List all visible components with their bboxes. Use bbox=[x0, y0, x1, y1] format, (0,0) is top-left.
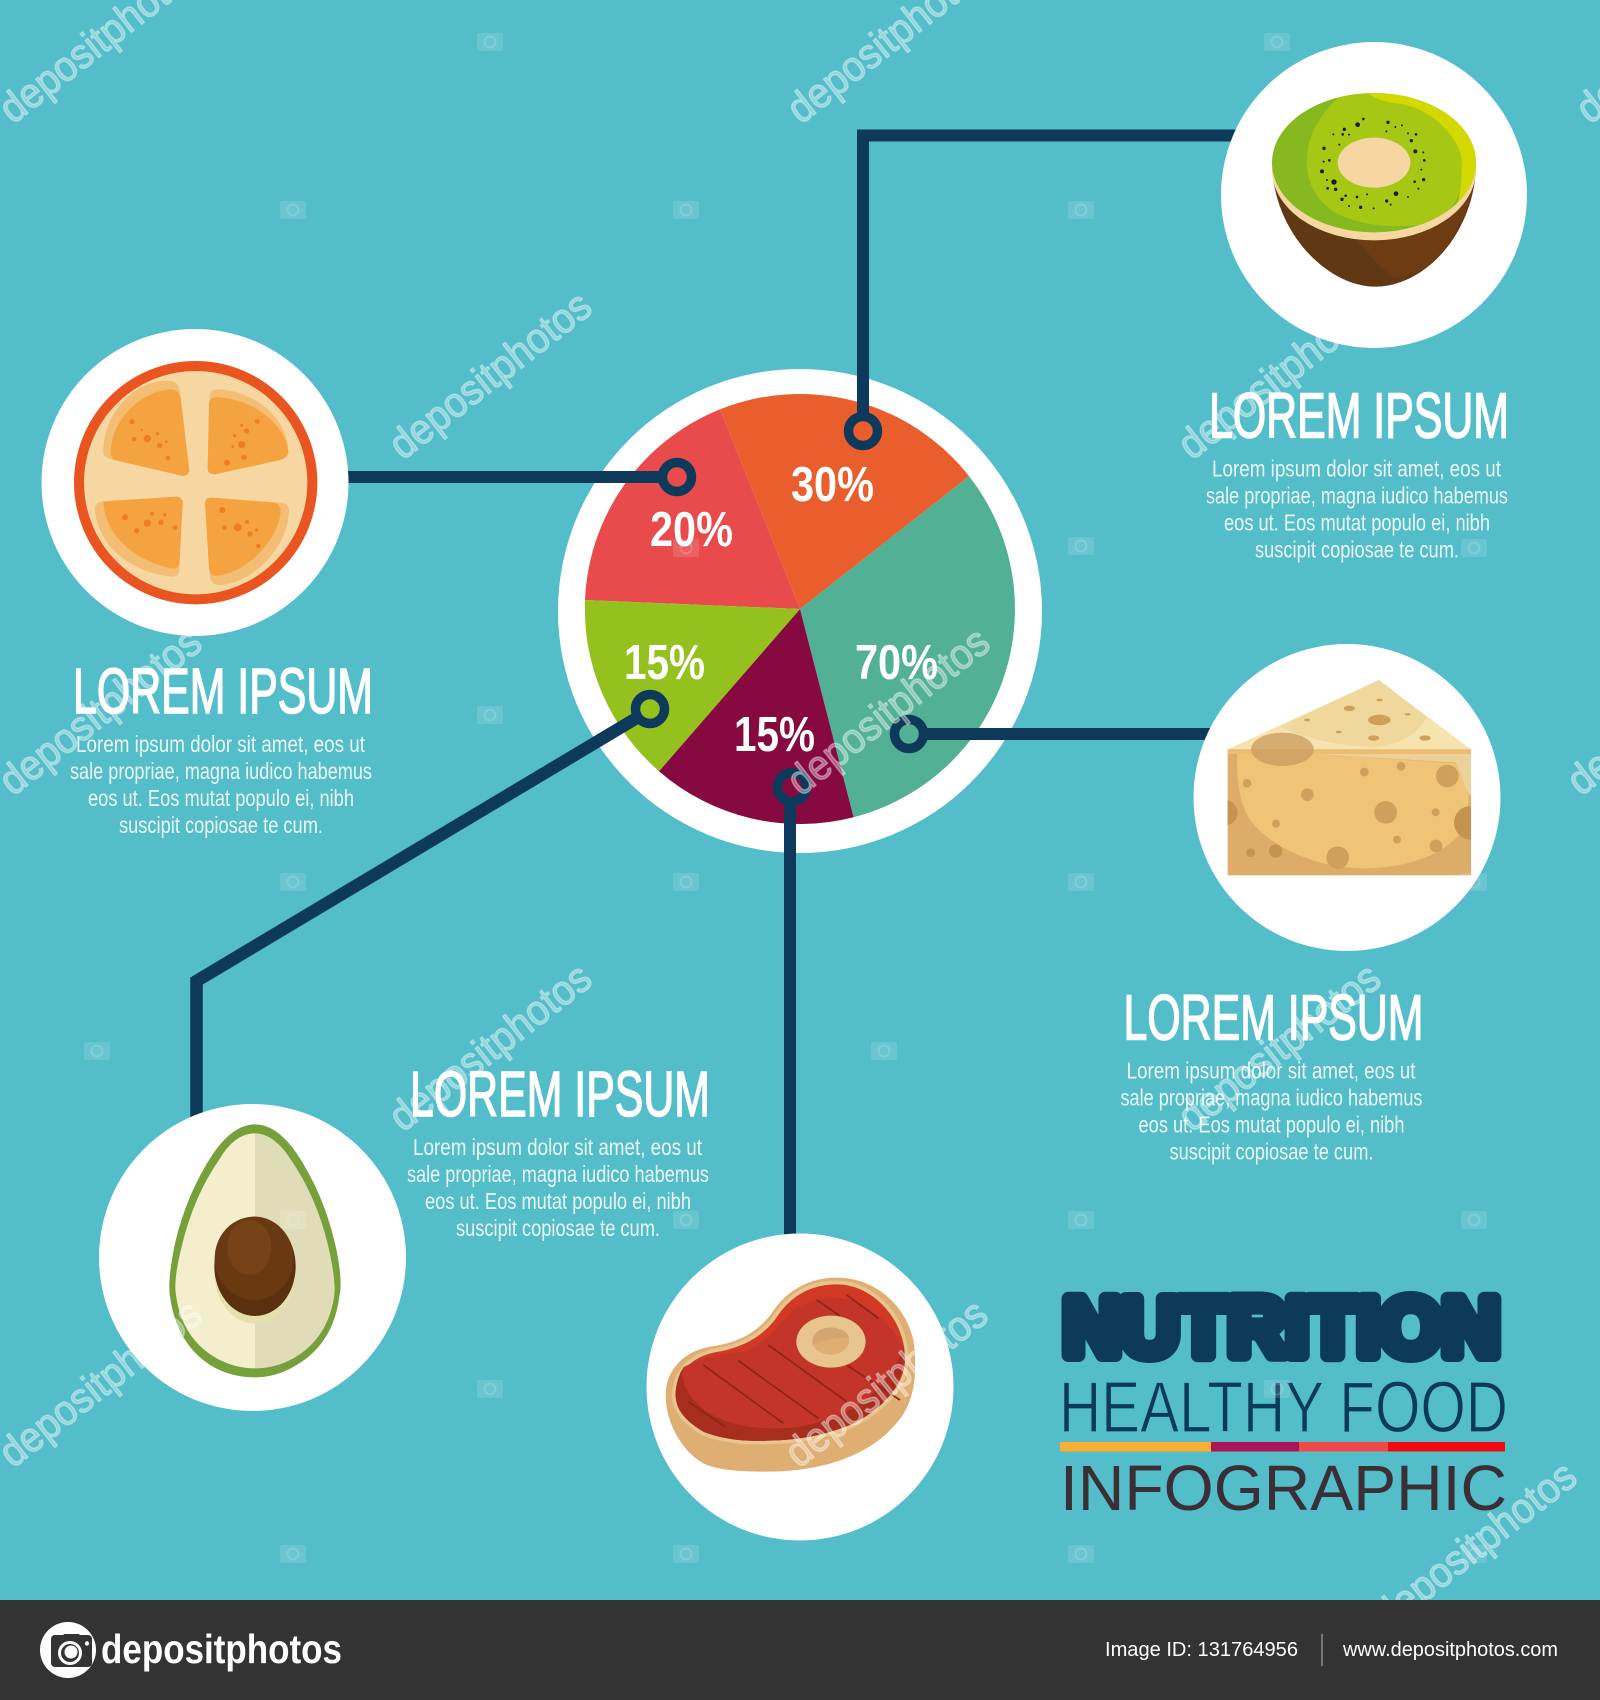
footer bar bbox=[0, 1600, 1600, 1700]
body copy bbox=[70, 731, 372, 838]
text block: avocado bbox=[407, 1058, 710, 1241]
text block: bread bbox=[70, 655, 373, 838]
watermark: depositphotos text: depositphotos bbox=[1169, 953, 1389, 1140]
watermark: depositphotos text: depositphotos bbox=[380, 953, 600, 1140]
text block: cheese bbox=[1120, 982, 1424, 1164]
heading: LOREM IPSUM bbox=[73, 655, 373, 727]
icon: avocado bbox=[99, 1104, 406, 1411]
connector: kiwi bbox=[863, 136, 1240, 420]
body copy: eos ut. Eos mutat populo ei, nibh bbox=[1224, 510, 1490, 536]
label 30%: 30% bbox=[791, 458, 874, 512]
label 15% lime: 15% bbox=[624, 636, 705, 690]
body copy bbox=[1120, 1058, 1422, 1164]
watermark: depositphotos text: depositphotos bbox=[776, 1289, 996, 1476]
body copy: Lorem ipsum dolor sit amet, eos ut bbox=[1126, 1058, 1416, 1084]
body copy: sale propriae, magna iudico habemus bbox=[1206, 482, 1508, 508]
body copy: sale propriae, magna iudico habemus bbox=[70, 758, 372, 784]
icon: cheese bbox=[1194, 644, 1500, 951]
text block: kiwi bbox=[1206, 380, 1509, 562]
body copy: Lorem ipsum dolor sit amet, eos ut bbox=[76, 731, 365, 757]
title: healthy food: HEALTHY FOOD bbox=[1059, 1368, 1508, 1448]
body copy bbox=[1206, 456, 1508, 562]
slice: green 70% bbox=[800, 476, 1015, 817]
slice: red 20% bbox=[585, 409, 800, 609]
watermark: depositphotos text: depositphotos bbox=[380, 281, 600, 468]
label 70%: 70% bbox=[855, 636, 938, 690]
icon: kiwi bbox=[1221, 42, 1527, 348]
heading: LOREM IPSUM bbox=[410, 1058, 710, 1130]
icon: steak bbox=[646, 1234, 954, 1540]
site url: www.depositphotos.com bbox=[1342, 1639, 1558, 1661]
watermark: depositphotos text: depositphotos bbox=[1365, 1451, 1585, 1638]
body copy: Lorem ipsum dolor sit amet, eos ut bbox=[413, 1134, 702, 1160]
label 15% maroon: 15% bbox=[734, 708, 815, 762]
node rings bbox=[636, 416, 924, 802]
colour bar bbox=[1060, 1442, 1505, 1452]
watermark: camera marks bbox=[84, 33, 1487, 1563]
slice: maroon 15% bbox=[659, 609, 854, 824]
pie chart panel bbox=[558, 369, 1042, 853]
title block bbox=[1059, 1282, 1508, 1524]
slice: orange 30% bbox=[720, 394, 969, 609]
connector: bread bbox=[340, 471, 662, 483]
body copy: Lorem ipsum dolor sit amet, eos ut bbox=[1212, 456, 1501, 482]
body copy: eos ut. Eos mutat populo ei, nibh bbox=[425, 1188, 691, 1214]
watermark: depositphotos text: depositphotos bbox=[778, 617, 998, 804]
body copy: suscipit copiosae te cum. bbox=[1170, 1138, 1374, 1164]
body copy bbox=[407, 1134, 709, 1241]
footer logo icon bbox=[40, 1622, 96, 1678]
image id: Image ID: 131764956 bbox=[1105, 1639, 1298, 1661]
heading: LOREM IPSUM bbox=[1124, 982, 1424, 1054]
footer logo wordmark: depositphotos bbox=[101, 1626, 342, 1672]
connector: avocado bbox=[196, 716, 640, 1120]
watermark: depositphotos text: depositphotos bbox=[1169, 281, 1389, 468]
label 20%: 20% bbox=[650, 503, 733, 557]
body copy: suscipit copiosae te cum. bbox=[119, 812, 323, 838]
body copy: eos ut. Eos mutat populo ei, nibh bbox=[88, 785, 354, 811]
body copy: sale propriae, magna iudico habemus bbox=[1120, 1084, 1422, 1110]
body copy: eos ut. Eos mutat populo ei, nibh bbox=[1138, 1112, 1404, 1138]
body copy: suscipit copiosae te cum. bbox=[456, 1215, 660, 1241]
title: infographic: INFOGRAPHIC bbox=[1060, 1452, 1507, 1524]
slice: lime 15% bbox=[585, 600, 800, 771]
title: nutrition: NUTRITION bbox=[1063, 1282, 1500, 1373]
connector lines bbox=[196, 136, 1240, 1245]
connector: steak bbox=[784, 800, 796, 1245]
body copy: suscipit copiosae te cum. bbox=[1255, 536, 1459, 562]
body copy: sale propriae, magna iudico habemus bbox=[407, 1161, 709, 1187]
icon: bread bun bbox=[42, 329, 348, 636]
connector: cheese bbox=[922, 728, 1215, 740]
